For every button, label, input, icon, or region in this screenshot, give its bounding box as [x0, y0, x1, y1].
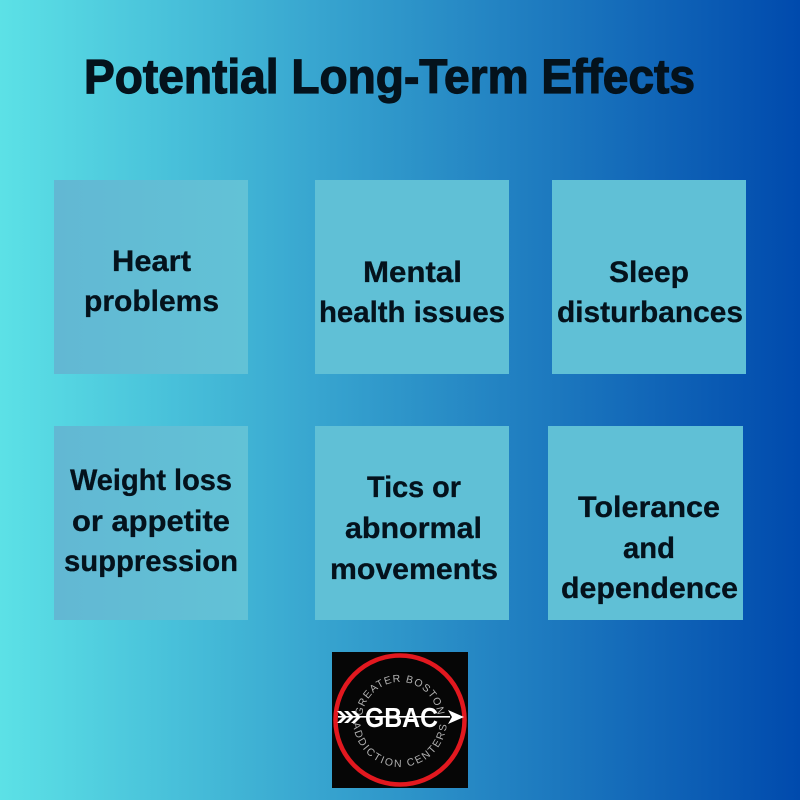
logo: GBAC: GREATER BOSTON	[356, 674, 445, 715]
panel: weight loss or appetite suppression: suppression	[64, 545, 238, 578]
panel: sleep disturbances: Sleep	[609, 256, 689, 289]
panel: tolerance and dependence: dependence	[561, 572, 738, 605]
logo: GBAC	[332, 652, 468, 788]
panel: sleep disturbances: disturbances	[557, 296, 743, 329]
panel: tics or abnormal movements: movements	[330, 553, 498, 586]
panel: weight loss or appetite suppression	[54, 426, 248, 620]
title: Potential Long-Term Effects	[84, 51, 695, 104]
panel: mental health issues: Mental	[363, 256, 462, 289]
panel: tics or abnormal movements: Tics or	[367, 471, 461, 504]
panel: heart problems: Heart	[112, 245, 191, 278]
panel: sleep disturbances	[552, 180, 746, 374]
panel: tolerance and dependence: Tolerance	[578, 491, 720, 524]
panel: tolerance and dependence	[548, 426, 743, 620]
panel: tics or abnormal movements: abnormal	[345, 512, 482, 545]
panel: heart problems: problems	[84, 285, 219, 318]
logo: GBAC: GBAC	[365, 702, 438, 733]
logo: GBAC: ADDICTION CENTERS	[352, 723, 446, 768]
panel: weight loss or appetite suppression: Weight loss	[70, 464, 232, 497]
panel: mental health issues: health issues	[319, 296, 505, 329]
panel: mental health issues	[315, 180, 509, 374]
panel: tolerance and dependence: and	[623, 532, 675, 565]
panel: heart problems	[54, 180, 248, 374]
panel: tics or abnormal movements	[315, 426, 509, 620]
panel: weight loss or appetite suppression: or appetite	[72, 505, 230, 538]
